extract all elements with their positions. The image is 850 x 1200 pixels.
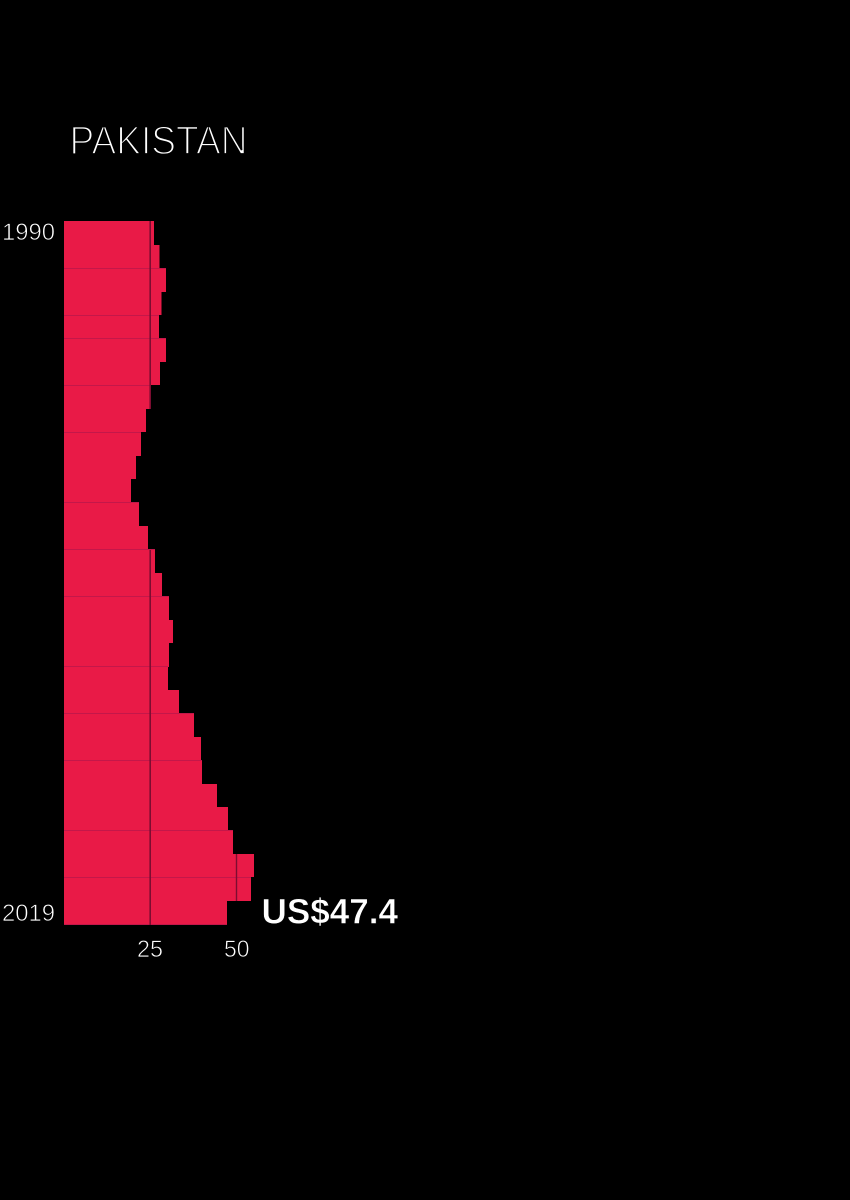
latest value callout: US$47.4 bbox=[262, 892, 398, 932]
axis label: 50: 50 bbox=[224, 936, 250, 963]
year label: 1990: 1990 bbox=[2, 219, 55, 246]
axis label: 25: 25 bbox=[137, 936, 163, 963]
reference line: 25 bbox=[149, 221, 151, 925]
row seams bbox=[64, 268, 251, 924]
title: PAKISTAN bbox=[70, 119, 248, 163]
reference line: 50 bbox=[236, 854, 238, 901]
bars bbox=[64, 221, 254, 925]
bar chart: yearly values 1990 to 2019 bbox=[64, 221, 254, 925]
year label: 2019: 2019 bbox=[2, 900, 55, 927]
